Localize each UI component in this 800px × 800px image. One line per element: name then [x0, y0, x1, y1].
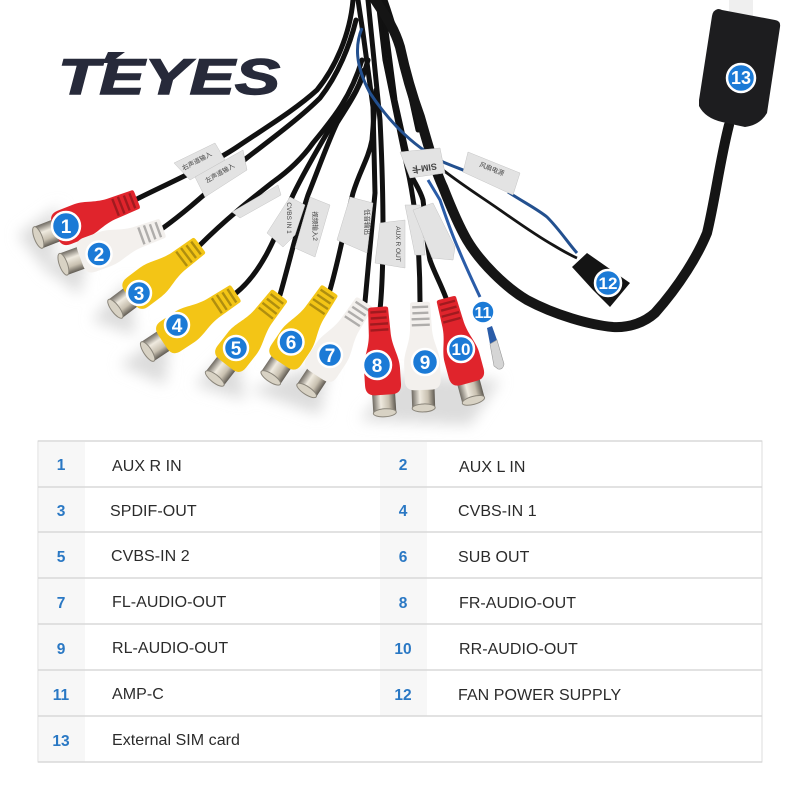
connector 3: 3 [134, 284, 144, 305]
connector 9 [402, 301, 442, 413]
row 2: 3 [57, 503, 66, 520]
connector 7: 7 [325, 346, 335, 367]
cable bundle [137, 0, 729, 327]
connector 4: 4 [172, 316, 183, 337]
black fan wire [443, 170, 577, 258]
blue wire [357, 28, 577, 253]
row 6: AMP-C [112, 686, 164, 703]
main SIM cable [375, 0, 729, 327]
row 6: FAN POWER SUPPLY [458, 687, 621, 704]
row 3: 5 [57, 549, 66, 566]
row 4: FR-AUDIO-OUT [459, 595, 576, 612]
connector 7 [289, 292, 380, 404]
row 2: SPDIF-OUT [110, 503, 197, 520]
row 1: 1 [57, 457, 66, 474]
SIM module 13 [699, 0, 780, 127]
connector 2: 2 [94, 245, 104, 266]
spec table [38, 441, 762, 762]
connector 4 [134, 278, 246, 369]
cable label tags: 风扇电源 [478, 160, 506, 178]
connector 9: 9 [420, 353, 430, 374]
cable label tags: 低音输出 [363, 209, 372, 235]
connector 1: 1 [61, 217, 72, 238]
row 3 [57, 548, 530, 566]
connector 10 [429, 293, 492, 409]
row 1: AUX L IN [459, 459, 526, 476]
row 6: 12 [394, 687, 412, 704]
row 5: RR-AUDIO-OUT [459, 641, 578, 658]
connector 10: 10 [452, 340, 470, 359]
connector 5 [198, 284, 294, 393]
row 4 [57, 594, 576, 612]
row 2 [57, 503, 537, 520]
row 1: 2 [399, 457, 407, 474]
row 2: CVBS-IN 1 [458, 503, 537, 520]
connector 5: 5 [231, 339, 242, 360]
row 5: 10 [394, 641, 412, 658]
row 7: External SIM card [112, 732, 240, 749]
cable label tags: CVBS IN 1 [285, 202, 292, 234]
connector 2 [53, 211, 169, 283]
connector drop shadows [18, 205, 500, 425]
blue wire 11 [428, 180, 480, 297]
row 7 [52, 732, 240, 750]
connector 1 [28, 182, 144, 256]
row 4: 7 [57, 595, 65, 612]
cable label tags [174, 143, 520, 268]
row 4: FL-AUDIO-OUT [112, 594, 227, 611]
fan connector 12 [572, 253, 630, 307]
connector 6 [254, 280, 345, 391]
row 2: 4 [399, 503, 408, 520]
row 1 [57, 457, 526, 476]
connector 8: 8 [372, 356, 382, 377]
row 3: 6 [399, 549, 408, 566]
logo: TEYES: TEYES [58, 49, 280, 105]
cable label tags: 右声道输入 [180, 149, 214, 172]
terminal 11 [472, 300, 504, 369]
cable label tags: 视频输入2 [311, 211, 320, 241]
row 3: SUB OUT [458, 549, 530, 566]
row 1: AUX R IN [112, 458, 182, 475]
cable label tags: 左声道输入 [203, 161, 237, 185]
row 6 [53, 686, 621, 704]
cable label tags: AUX R OUT [394, 226, 401, 262]
SIM module 13: 13 [731, 68, 751, 88]
logo accent wedge [103, 52, 125, 63]
connector 6: 6 [286, 333, 296, 354]
row 5: 9 [57, 641, 66, 658]
row 6: 11 [53, 687, 70, 704]
connector 3 [101, 231, 211, 326]
row 3: CVBS-IN 2 [111, 548, 190, 565]
terminal 11: 11 [475, 305, 492, 322]
row 5 [57, 640, 578, 658]
fan connector 12: 12 [599, 274, 617, 293]
number column backgrounds [39, 442, 427, 762]
cable label tags: SIM卡 [411, 161, 438, 176]
row 4: 8 [399, 595, 408, 612]
connector 8 [360, 306, 403, 418]
row 7: 13 [52, 733, 70, 750]
row 5: RL-AUDIO-OUT [112, 640, 228, 657]
